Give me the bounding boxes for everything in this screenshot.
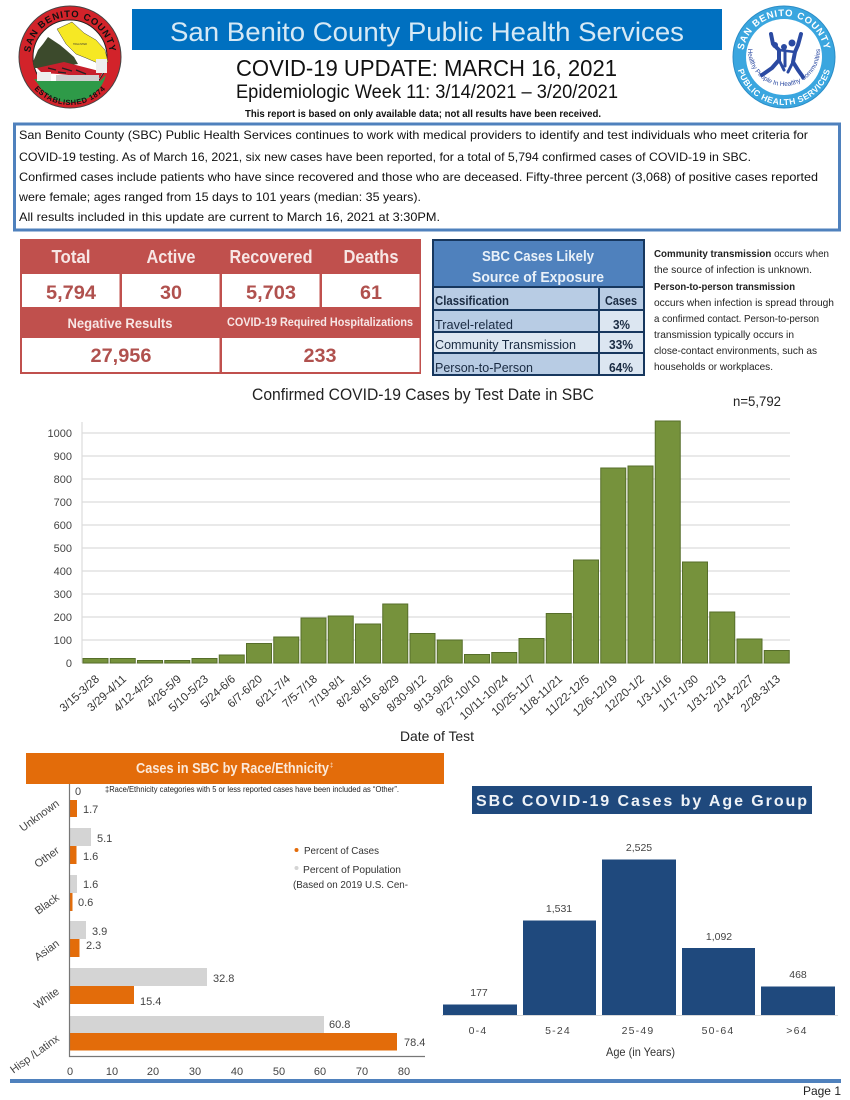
title banner xyxy=(132,9,722,50)
green bars xyxy=(83,421,789,663)
bar value labels: 60.8 xyxy=(329,1019,350,1031)
panel: summary text xyxy=(14,124,840,230)
x axis date labels: 10/11-10/24 xyxy=(458,673,511,723)
transmission definitions text: Community transmission occurs when xyxy=(654,248,829,260)
chart title: Confirmed COVID-19 Cases by Test Date in SBC xyxy=(252,386,594,404)
category labels xyxy=(8,798,62,1076)
footer rule xyxy=(10,1079,841,1083)
bar value labels: 1.6 xyxy=(83,851,98,863)
category labels: Hisp /Latinx xyxy=(8,1032,62,1076)
report disclaimer: This report is based on only available data; not all results have been received. xyxy=(245,108,601,120)
totals headers: Total xyxy=(52,247,90,267)
bar value labels xyxy=(75,786,425,1049)
transmission definitions text: occurs when infection is spread through xyxy=(654,297,834,309)
county seal logo: HOLLISTER xyxy=(73,43,87,46)
x axis labels: 40 xyxy=(231,1066,243,1078)
x axis date labels: 6/7-6/20 xyxy=(226,673,265,710)
table rows xyxy=(435,293,637,375)
age value labels: 1,531 xyxy=(546,903,572,915)
age category labels: 0-4 xyxy=(469,1025,487,1037)
age axis title: Age (in Years) xyxy=(606,1045,675,1059)
table rows: Classification xyxy=(435,293,509,308)
totals headers: Deaths xyxy=(344,247,398,267)
panel: case totals xyxy=(20,239,421,374)
case count note: n=5,792 xyxy=(733,394,781,409)
axes xyxy=(70,784,425,1056)
x axis date labels: 9/27-10/10 xyxy=(434,673,483,719)
y axis labels: 100 xyxy=(54,635,72,647)
x axis date labels: 7/5-7/18 xyxy=(281,673,320,710)
summary paragraph lines: All results included in this update are current to March 16, 2021 at 3:30PM. xyxy=(19,210,440,224)
age category labels: 25-49 xyxy=(622,1025,654,1037)
age category labels: 5-24 xyxy=(545,1025,571,1037)
x axis date labels: 5/24-6/6 xyxy=(199,673,238,710)
category labels: Black xyxy=(33,891,62,917)
table rows: Community Transmission xyxy=(435,337,576,352)
totals values: 61 xyxy=(360,283,382,304)
category labels: Other xyxy=(32,845,62,871)
totals values xyxy=(46,283,382,367)
category labels: White xyxy=(32,986,62,1012)
y axis labels xyxy=(48,428,72,670)
totals values: 27,956 xyxy=(90,346,152,367)
health services logo: PUBLIC HEALTH SERVICES xyxy=(738,68,830,105)
x axis date labels: 8/30-9/12 xyxy=(385,673,429,715)
y axis labels: 400 xyxy=(54,566,72,578)
table rows: Cases xyxy=(605,293,637,308)
bar value labels: 2.3 xyxy=(86,940,101,952)
county seal logo xyxy=(18,6,122,108)
table rows: 3% xyxy=(613,317,630,332)
y axis labels: 700 xyxy=(54,497,72,509)
bar chart: race and ethnicity xyxy=(8,784,425,1078)
totals values: 5,703 xyxy=(246,283,296,304)
transmission definitions text: close-contact environments, such as xyxy=(654,345,817,357)
x axis labels: 0 xyxy=(67,1066,73,1078)
table rows: Person-to-Person xyxy=(435,360,533,375)
age group heading xyxy=(472,786,812,814)
x axis labels: 30 xyxy=(189,1066,201,1078)
x axis labels: 70 xyxy=(356,1066,368,1078)
transmission definitions text: a confirmed contact. Person-to-person xyxy=(654,313,819,325)
epidemiologic week heading: Epidemiologic Week 11: 3/14/2021 – 3/20/2021 xyxy=(236,82,618,103)
table rows: 33% xyxy=(609,337,633,352)
x axis date labels: 2/14-2/27 xyxy=(712,673,756,715)
transmission definitions text: households or workplaces. xyxy=(654,361,773,373)
x axis date labels: 12/20-1/2 xyxy=(603,673,647,715)
x axis date labels: 7/19-8/1 xyxy=(308,673,347,710)
totals headers xyxy=(52,247,413,331)
y axis labels: 500 xyxy=(54,543,72,555)
bar value labels: 0.6 xyxy=(78,897,93,909)
case bars xyxy=(70,800,397,1050)
x axis date labels: 4/26-5/9 xyxy=(145,673,184,710)
transmission definitions text xyxy=(654,248,834,373)
y axis labels: 900 xyxy=(54,451,72,463)
totals headers: Active xyxy=(146,247,196,267)
age category labels xyxy=(469,1025,808,1037)
race chart legend: (Based on 2019 U.S. Cen- xyxy=(293,879,408,891)
category labels: Unknown xyxy=(18,798,62,834)
category labels: Asian xyxy=(32,938,62,964)
age value labels: 468 xyxy=(789,969,807,981)
age value labels: 1,092 xyxy=(706,931,732,943)
county seal logo: ESTABLISHED 1874 xyxy=(34,86,105,106)
table rows: Travel-related xyxy=(435,317,513,332)
health services logo xyxy=(732,6,836,108)
transmission definitions text: the source of infection is unknown. xyxy=(654,264,812,276)
race chart legend: Percent of Population xyxy=(303,864,401,876)
health services logo: Healthy People In Healthy Communities xyxy=(748,49,820,86)
bar value labels: 0 xyxy=(75,786,81,798)
x axis date labels: 8/16-8/29 xyxy=(358,673,402,715)
table title: SBC Cases Likely xyxy=(482,248,595,265)
bar value labels: 15.4 xyxy=(140,996,161,1008)
county seal logo: SAN BENITO COUNTY xyxy=(24,10,116,52)
bar chart: cases by test date xyxy=(48,421,790,723)
summary paragraph lines xyxy=(18,128,818,224)
x axis date labels: 1/31-2/13 xyxy=(685,673,729,715)
x axis title: Date of Test xyxy=(400,728,474,744)
x axis labels xyxy=(67,1066,410,1078)
title banner: San Benito County Public Health Services xyxy=(170,17,684,47)
bar value labels: 32.8 xyxy=(213,973,234,985)
y axis labels: 200 xyxy=(54,612,72,624)
x axis date labels: 1/17-1/30 xyxy=(657,673,701,715)
age value labels: 2,525 xyxy=(626,842,652,854)
totals headers: Recovered xyxy=(230,247,312,267)
summary paragraph lines: were female; ages ranged from 15 days to 101 years (median: 35 years). xyxy=(18,190,421,204)
x axis date labels: 12/6-12/19 xyxy=(571,673,620,719)
race and ethnicity heading: Cases in SBC by Race/Ethnicity xyxy=(136,761,329,777)
race and ethnicity heading: ‡ xyxy=(330,763,333,769)
table title xyxy=(472,248,604,286)
y axis labels: 1000 xyxy=(48,428,72,440)
totals values: 30 xyxy=(160,283,182,304)
age category labels: >64 xyxy=(786,1025,808,1037)
page number: Page 1 xyxy=(803,1084,841,1098)
x axis date labels: 8/2-8/15 xyxy=(335,673,374,710)
transmission definitions text: Person-to-person transmission xyxy=(654,281,795,293)
bar chart: age group xyxy=(442,842,838,1059)
bar value labels: 78.4 xyxy=(404,1037,425,1049)
bar value labels: 1.7 xyxy=(83,804,98,816)
age value labels xyxy=(470,842,807,999)
totals headers: Negative Results xyxy=(68,316,172,331)
x axis date labels: 9/13-9/26 xyxy=(412,673,456,715)
race chart legend: Percent of Cases xyxy=(304,845,379,857)
bar value labels: 1.6 xyxy=(83,879,98,891)
summary paragraph lines: San Benito County (SBC) Public Health Services continues to work with medical providers to identify and test individuals who meet criteria for xyxy=(19,128,808,142)
age group heading: SBC COVID-19 Cases by Age Group xyxy=(476,793,807,810)
race chart legend xyxy=(293,845,408,891)
x axis date labels: 1/3-1/16 xyxy=(635,673,674,710)
health services logo: SAN BENITO COUNTY xyxy=(738,9,831,50)
x axis date labels: 3/15-3/28 xyxy=(58,673,102,715)
x axis labels: 80 xyxy=(398,1066,410,1078)
age category labels: 50-64 xyxy=(702,1025,734,1037)
x axis date labels: 11/8-11/21 xyxy=(517,673,565,718)
x axis labels: 50 xyxy=(273,1066,285,1078)
report date heading: COVID-19 UPDATE: MARCH 16, 2021 xyxy=(236,55,617,81)
x axis date labels: 6/21-7/4 xyxy=(254,673,293,710)
x axis date labels xyxy=(58,673,783,723)
y axis labels: 0 xyxy=(66,658,72,670)
x axis date labels: 4/12-4/25 xyxy=(112,673,156,715)
transmission definitions text: transmission typically occurs in xyxy=(654,329,794,341)
x axis date labels: 10/25-11/7 xyxy=(490,673,538,718)
table rows: 64% xyxy=(609,360,633,375)
x axis labels: 60 xyxy=(314,1066,326,1078)
x axis labels: 10 xyxy=(106,1066,118,1078)
summary paragraph lines: Confirmed cases include patients who have since recovered and those who are deceased. Fifty-three percent (3,068) of positive cases reported xyxy=(19,170,818,184)
y axis labels: 300 xyxy=(54,589,72,601)
population bars xyxy=(70,828,324,1033)
totals values: 5,794 xyxy=(46,283,96,304)
y axis labels: 800 xyxy=(54,474,72,486)
age bars xyxy=(443,860,835,1015)
race footnote: ‡Race/Ethnicity categories with 5 or less reported cases have been included as “Other”. xyxy=(105,784,399,794)
age value labels: 177 xyxy=(470,987,488,999)
x axis date labels: 11/22-12/5 xyxy=(544,673,592,718)
x axis labels: 20 xyxy=(147,1066,159,1078)
x axis date labels: 5/10-5/23 xyxy=(167,673,211,715)
summary paragraph lines: COVID-19 testing. As of March 16, 2021, six new cases have been reported, for a total of 5,794 confirmed cases of COVID-19 in SBC. xyxy=(19,150,751,164)
x axis date labels: 2/28-3/13 xyxy=(739,673,783,715)
bar value labels: 3.9 xyxy=(92,926,107,938)
table title: Source of Exposure xyxy=(472,269,604,286)
totals headers: COVID-19 Required Hospitalizations xyxy=(227,317,413,329)
bar value labels: 5.1 xyxy=(97,833,112,845)
panel: likely source of exposure table xyxy=(432,239,645,376)
totals values: 233 xyxy=(304,346,336,367)
x axis date labels: 3/29-4/11 xyxy=(85,673,129,714)
y axis labels: 600 xyxy=(54,520,72,532)
race and ethnicity heading xyxy=(26,753,444,784)
